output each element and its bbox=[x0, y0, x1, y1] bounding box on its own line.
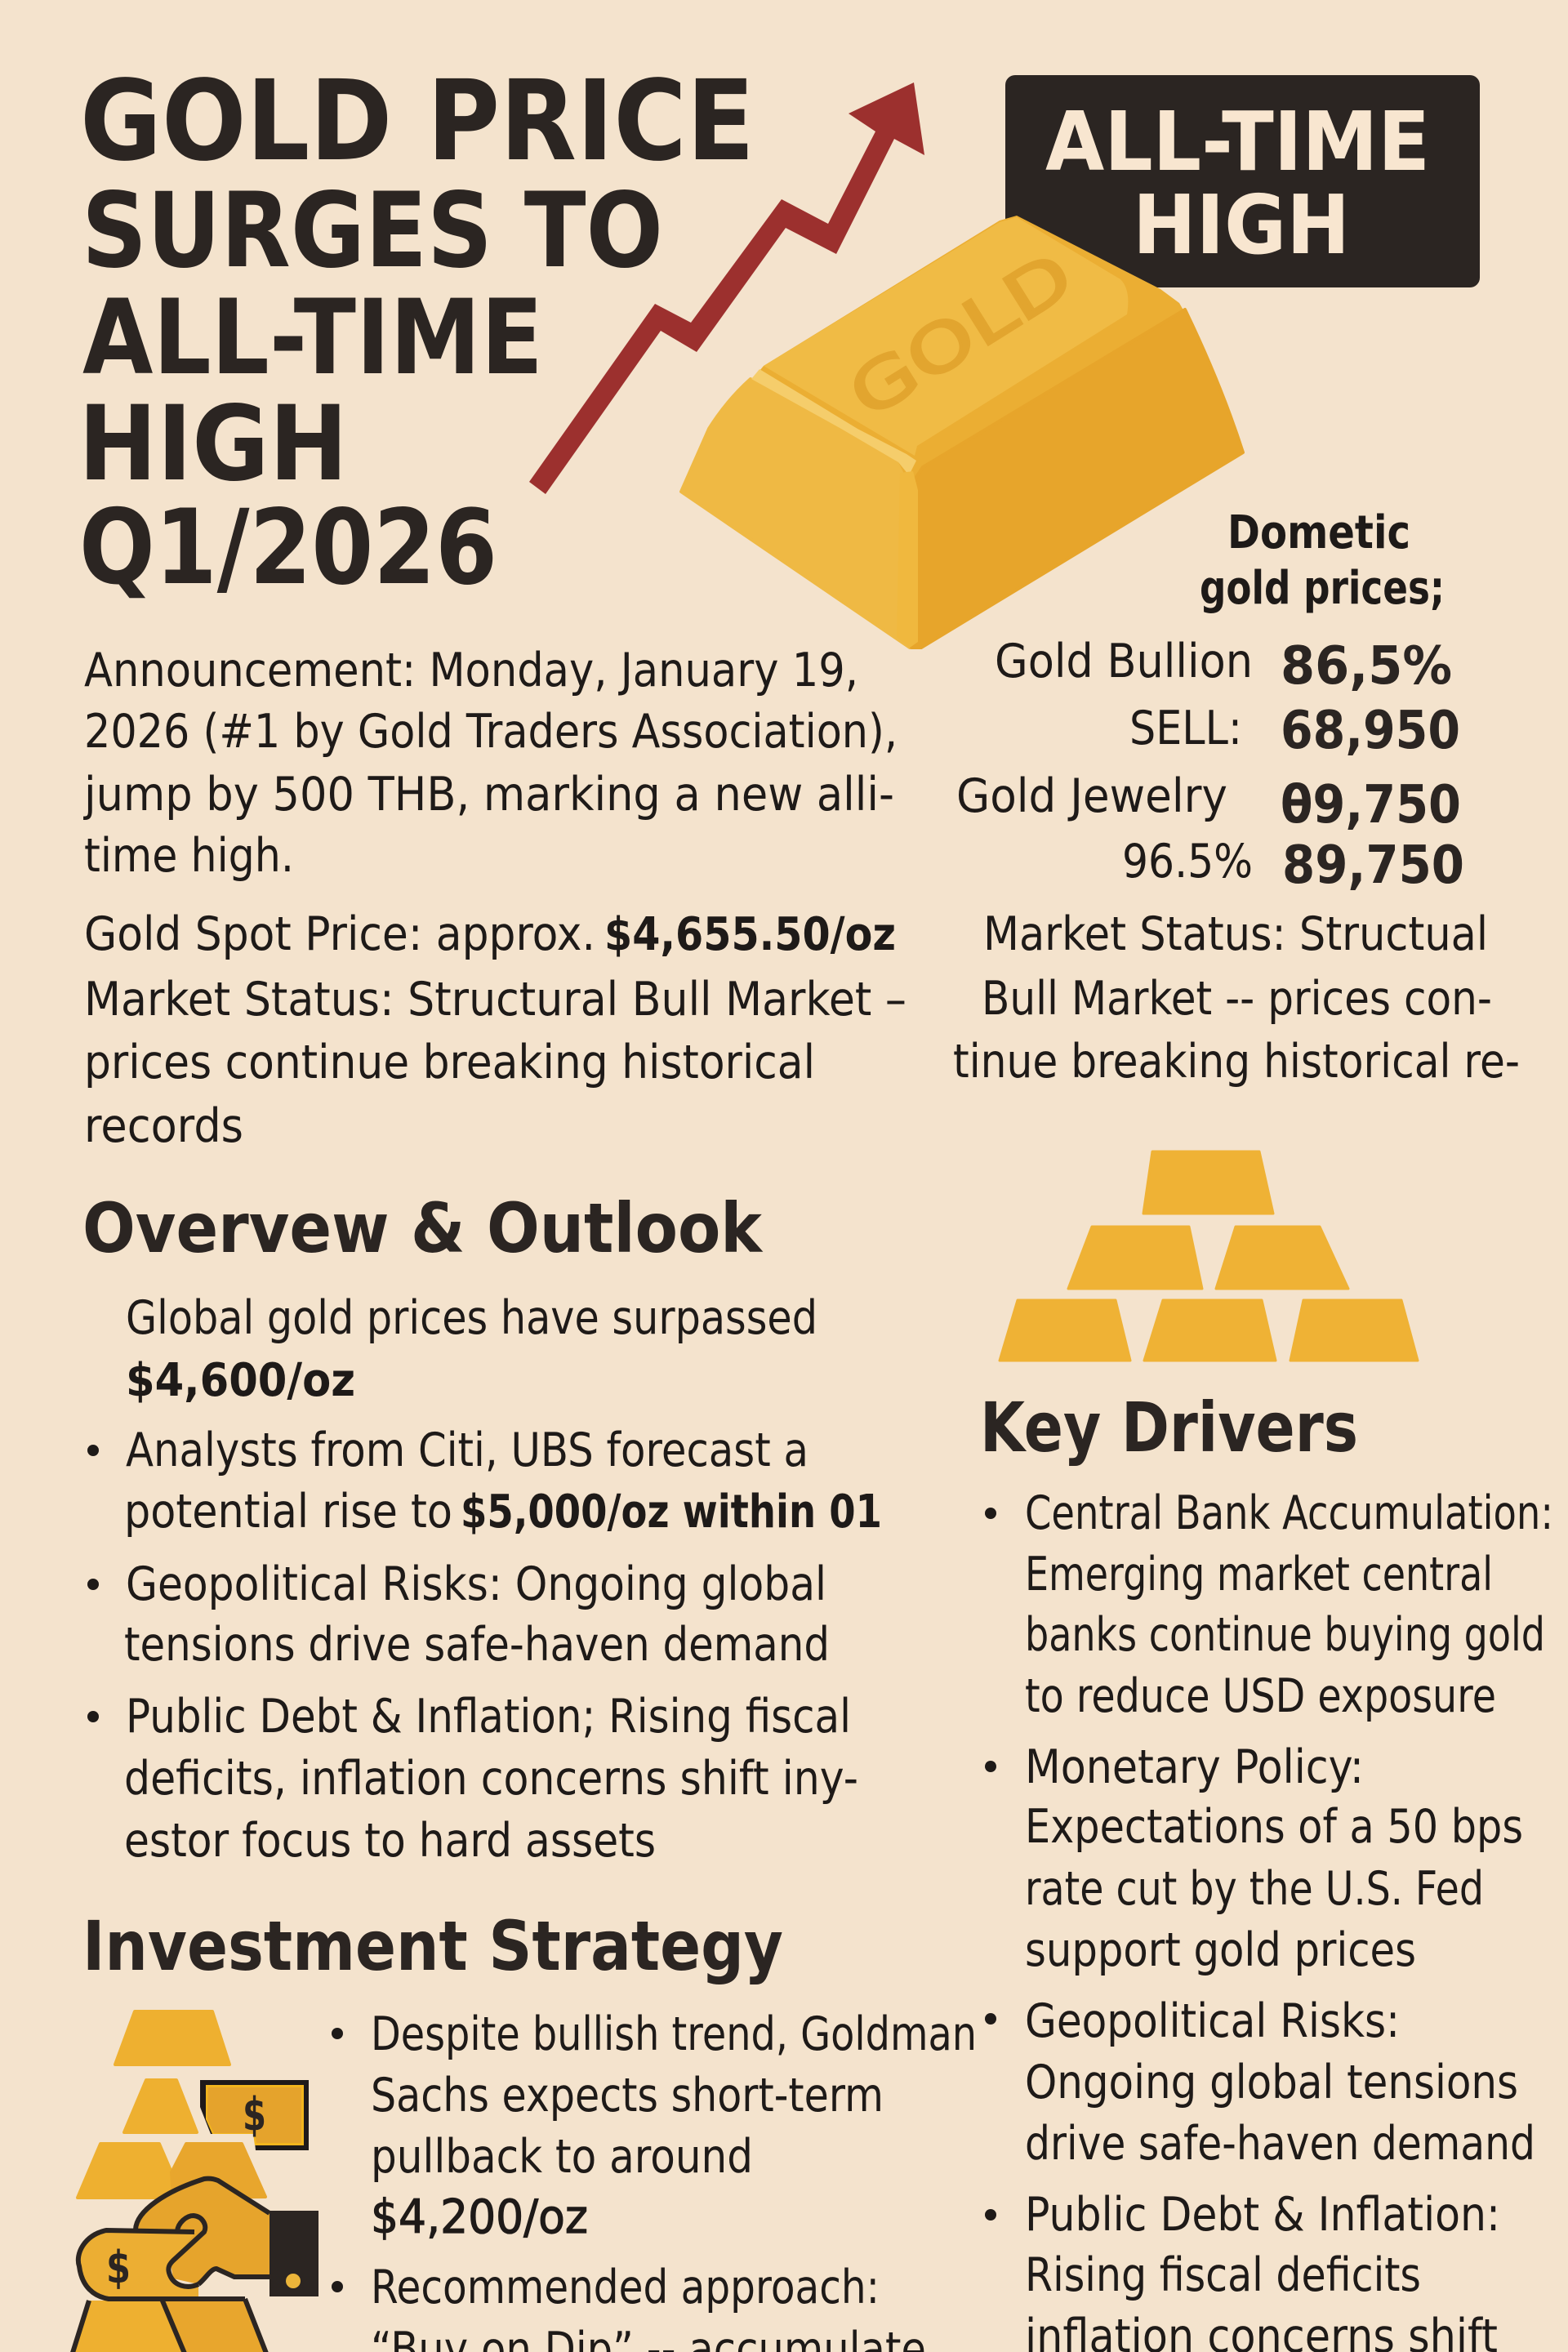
text block: spot price and market status: prices continue breaking historical bbox=[84, 1036, 815, 1089]
badge: all-time high: HIGH bbox=[1133, 177, 1350, 273]
heading: domestic gold prices: Dometic bbox=[1227, 506, 1410, 559]
list: key drivers bullets bbox=[985, 1486, 1553, 2352]
list: overview bullets bbox=[87, 1291, 882, 1868]
badge: all-time high: ALL-TIME bbox=[1045, 94, 1430, 189]
icon: bottom gold bars bbox=[69, 2299, 270, 2352]
heading: domestic gold prices: gold prices; bbox=[1200, 562, 1445, 615]
icon: gold bar: GOLD bbox=[836, 238, 1086, 433]
heading: overview and outlook: Overvew & Outlook bbox=[82, 1188, 764, 1268]
price table bbox=[956, 635, 1464, 896]
heading: investment strategy: Investment Strategy bbox=[82, 1906, 783, 1986]
heading: key drivers: Key Drivers bbox=[980, 1388, 1358, 1468]
list: key drivers bullets: Rising fiscal deficits bbox=[1025, 2248, 1421, 2302]
icon: banknote bbox=[78, 2216, 245, 2299]
list: investment strategy bullets bbox=[332, 2007, 977, 2352]
text block: spot price and market status: records bbox=[84, 1099, 243, 1153]
arrow: rising price line bbox=[529, 82, 924, 494]
market status note bbox=[953, 907, 1520, 1089]
icon: gold stack with hand and money bbox=[69, 2011, 318, 2352]
price table: 68,950 bbox=[1281, 701, 1460, 761]
list: investment strategy bullets: Sachs expects short-term bbox=[371, 2069, 884, 2123]
text block: announcement: 2026 (#1 by Gold Traders Association), bbox=[84, 705, 898, 759]
title: SURGES TO bbox=[82, 170, 663, 291]
list: overview bullets: Public Debt & Inflation; Rising fiscal bbox=[126, 1690, 851, 1744]
title: Q1/2026 bbox=[79, 487, 497, 608]
text block: announcement: time high. bbox=[84, 829, 294, 883]
text block: spot price and market status bbox=[84, 907, 906, 1153]
title: GOLD PRICE bbox=[80, 57, 755, 186]
list: overview bullets: Global gold prices have surpassed bbox=[126, 1291, 817, 1345]
list: overview bullets: $5,000/oz within 01 bbox=[461, 1486, 882, 1539]
price table: SELL: bbox=[1129, 702, 1242, 755]
title bbox=[78, 57, 755, 608]
icon: hand bbox=[136, 2179, 318, 2296]
title: HIGH bbox=[78, 383, 348, 504]
list: investment strategy bullets: $4,200/oz bbox=[371, 2190, 588, 2244]
list: key drivers bullets: Public Debt & Inflation: bbox=[1025, 2188, 1500, 2242]
list: key drivers bullets: Monetary Policy: bbox=[1025, 1740, 1364, 1794]
icon: dollar card: $ bbox=[243, 2088, 266, 2141]
list: overview bullets: potential rise to bbox=[124, 1485, 452, 1539]
icon: gold bar bbox=[681, 216, 1243, 648]
text block: spot price and market status: Market Status: Structural Bull Market – bbox=[84, 973, 906, 1027]
market status note: Market Status: Structual bbox=[983, 907, 1488, 961]
price table: 86,5% bbox=[1281, 636, 1452, 697]
price table: Gold Bullion bbox=[995, 635, 1253, 688]
list: overview bullets: Analysts from Citi, UBS forecast a bbox=[126, 1423, 808, 1477]
list: investment strategy bullets: Despite bullish trend, Goldman bbox=[371, 2007, 977, 2061]
list: investment strategy bullets: pullback to around bbox=[371, 2130, 753, 2184]
title: ALL-TIME bbox=[82, 277, 543, 398]
list: overview bullets: tensions drive safe-haven demand bbox=[124, 1618, 830, 1672]
list: overview bullets: estor focus to hard assets bbox=[124, 1814, 656, 1868]
text block: announcement bbox=[82, 644, 898, 883]
price table: 89,750 bbox=[1282, 835, 1464, 896]
text block: announcement: Announcement: Monday, January 19, bbox=[84, 644, 858, 697]
list: overview bullets: deficits, inflation concerns shift iny- bbox=[124, 1752, 858, 1806]
icon: gold bar pyramid bbox=[1000, 1152, 1418, 1361]
badge: all-time high bbox=[1005, 75, 1480, 287]
text block: spot price and market status: $4,655.50/oz bbox=[604, 908, 896, 961]
text block: spot price and market status: Gold Spot Price: approx. bbox=[84, 907, 595, 961]
list: investment strategy bullets: Recommended approach: bbox=[371, 2261, 880, 2314]
list: key drivers bullets: support gold prices bbox=[1025, 1923, 1416, 1977]
list: overview bullets: Geopolitical Risks: Ongoing global bbox=[126, 1557, 826, 1611]
text block: announcement: jump by 500 THB, marking a new alli- bbox=[82, 768, 894, 822]
list: key drivers bullets: rate cut by the U.S. Fed bbox=[1025, 1862, 1484, 1916]
price table: Gold Jewelry bbox=[956, 769, 1227, 823]
price table: θ9,750 bbox=[1281, 775, 1461, 835]
list: overview bullets: $4,600/oz bbox=[126, 1354, 355, 1407]
icon: banknote: $ bbox=[106, 2242, 131, 2293]
price table: 96.5% bbox=[1122, 835, 1253, 889]
icon: dollar card bbox=[200, 2080, 309, 2150]
list: key drivers bullets: Geopolitical Risks: bbox=[1025, 1994, 1400, 2048]
market status note: Bull Market -- prices con- bbox=[982, 972, 1492, 1026]
panel: domestic gold prices bbox=[953, 506, 1520, 1089]
heading: domestic gold prices bbox=[1200, 506, 1445, 615]
